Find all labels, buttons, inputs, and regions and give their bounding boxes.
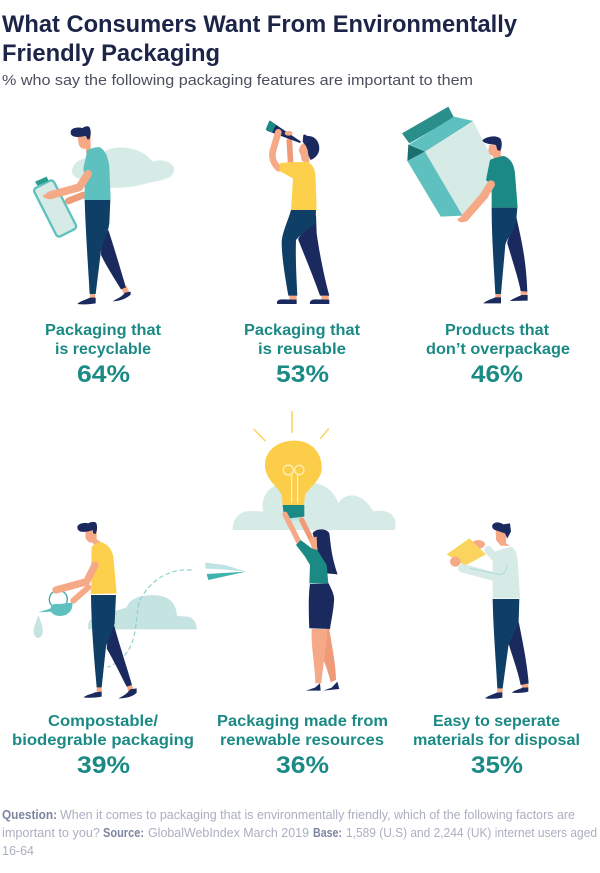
label: easy to separate 35% <box>413 713 580 779</box>
label: renewable resources 36%: renewable resources <box>220 732 384 749</box>
label: reusable 53%: 53% <box>276 361 329 388</box>
label: don't overpackage 46%: Products that <box>445 322 549 339</box>
title: Friendly Packaging <box>2 40 220 67</box>
title: What Consumers Want From Environmentally <box>2 11 518 38</box>
label: easy to separate 35%: Easy to seperate <box>433 713 560 730</box>
label: compostable 39% <box>12 713 194 779</box>
footer: question, source and base <box>2 808 597 858</box>
label: compostable 39%: biodegrable packaging <box>12 732 194 749</box>
footer: question, source and base: Source: <box>103 826 144 840</box>
footer: question, source and base: When it comes to packaging that is environmentally friendly, which of the following factors are <box>60 808 575 822</box>
illustration: man holding yellow paper <box>447 522 529 699</box>
label: easy to separate 35%: 35% <box>471 752 523 779</box>
label: renewable resources 36% <box>217 713 388 779</box>
subtitle: % who say the following packaging features are important to them <box>2 72 473 89</box>
illustration: man watering with cloud and paper plane <box>34 522 246 698</box>
title <box>2 11 518 67</box>
footer: question, source and base: important to you? <box>2 826 100 840</box>
label: recyclable 64%: is recyclable <box>55 341 151 358</box>
label: renewable resources 36%: Packaging made from <box>217 713 388 730</box>
label: reusable 53% <box>244 322 360 388</box>
label: reusable 53%: Packaging that <box>244 322 360 339</box>
illustration: man carrying milk carton <box>402 107 528 303</box>
label: don't overpackage 46%: 46% <box>471 361 523 388</box>
footer: question, source and base: Question: <box>2 808 57 822</box>
label: compostable 39%: Compostable/ <box>48 713 159 730</box>
label: don't overpackage 46% <box>426 322 570 388</box>
footer: question, source and base: Base: <box>313 826 342 840</box>
illustration: man holding battery with cloud <box>33 126 174 304</box>
label: recyclable 64% <box>45 322 161 388</box>
label: renewable resources 36%: 36% <box>276 752 329 779</box>
footer: question, source and base: 16-64 <box>2 844 34 858</box>
label: don't overpackage 46%: don’t overpackage <box>426 341 570 358</box>
label: recyclable 64%: 64% <box>77 361 130 388</box>
label: compostable 39%: 39% <box>77 752 130 779</box>
illustration: woman holding light bulb with cloud <box>233 412 396 691</box>
label: reusable 53%: is reusable <box>258 341 346 358</box>
footer: question, source and base: GlobalWebIndex March 2019 <box>148 826 309 840</box>
label: easy to separate 35%: materials for disposal <box>413 732 580 749</box>
label: recyclable 64%: Packaging that <box>45 322 161 339</box>
illustration: man with telescope <box>266 121 329 304</box>
